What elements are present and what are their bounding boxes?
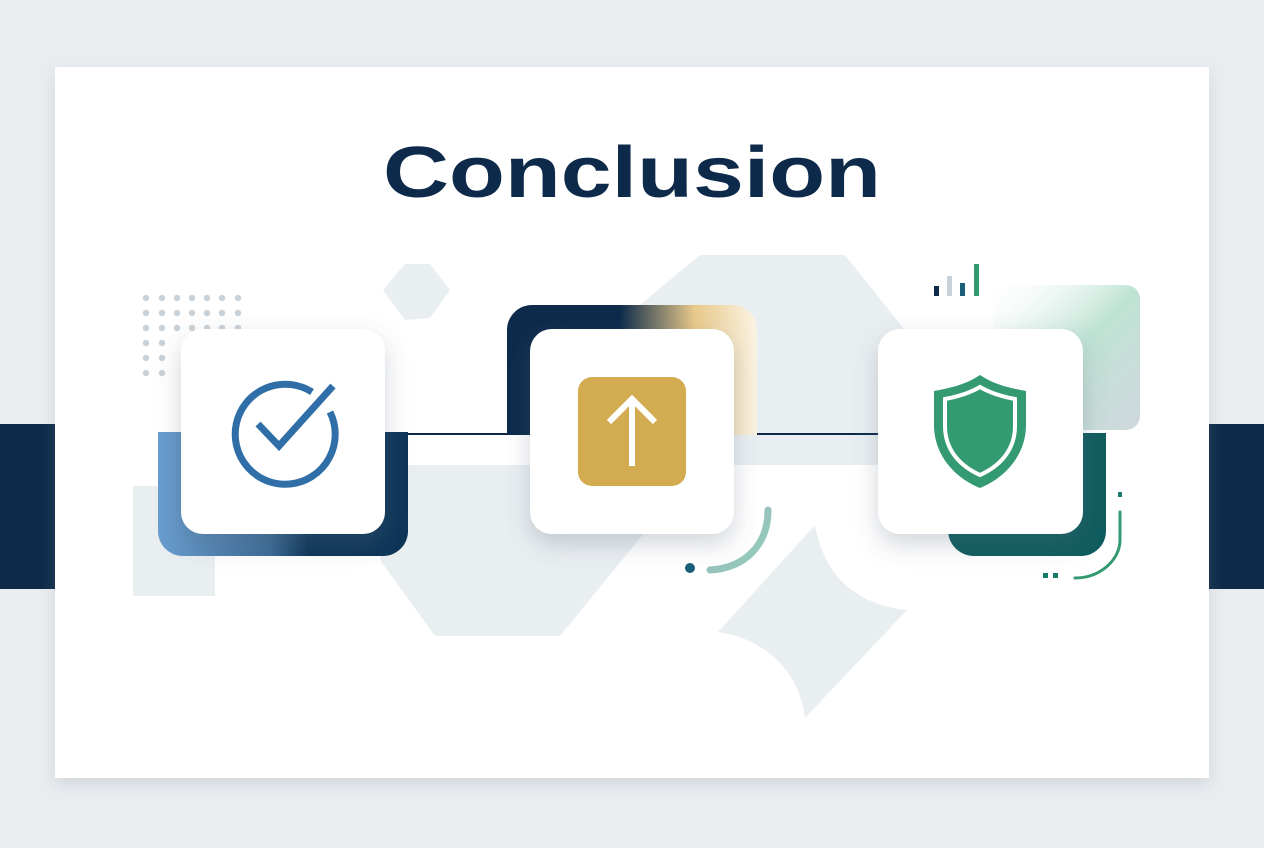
connector lines [385, 433, 878, 435]
dot grid [143, 295, 241, 376]
side band right [1204, 424, 1264, 589]
icon: up arrow [578, 377, 686, 486]
icon: check circle [235, 384, 335, 484]
card 3: shield [878, 285, 1140, 556]
icon: shield [934, 375, 1026, 488]
background shapes [133, 255, 907, 718]
icon: bar chart [934, 264, 979, 296]
side band left [0, 424, 60, 589]
title: Conclusion [383, 133, 881, 213]
card 2: up arrow [507, 305, 757, 534]
decorative arcs [685, 492, 1122, 578]
card 1: check [158, 329, 408, 556]
main panel [55, 67, 1209, 778]
